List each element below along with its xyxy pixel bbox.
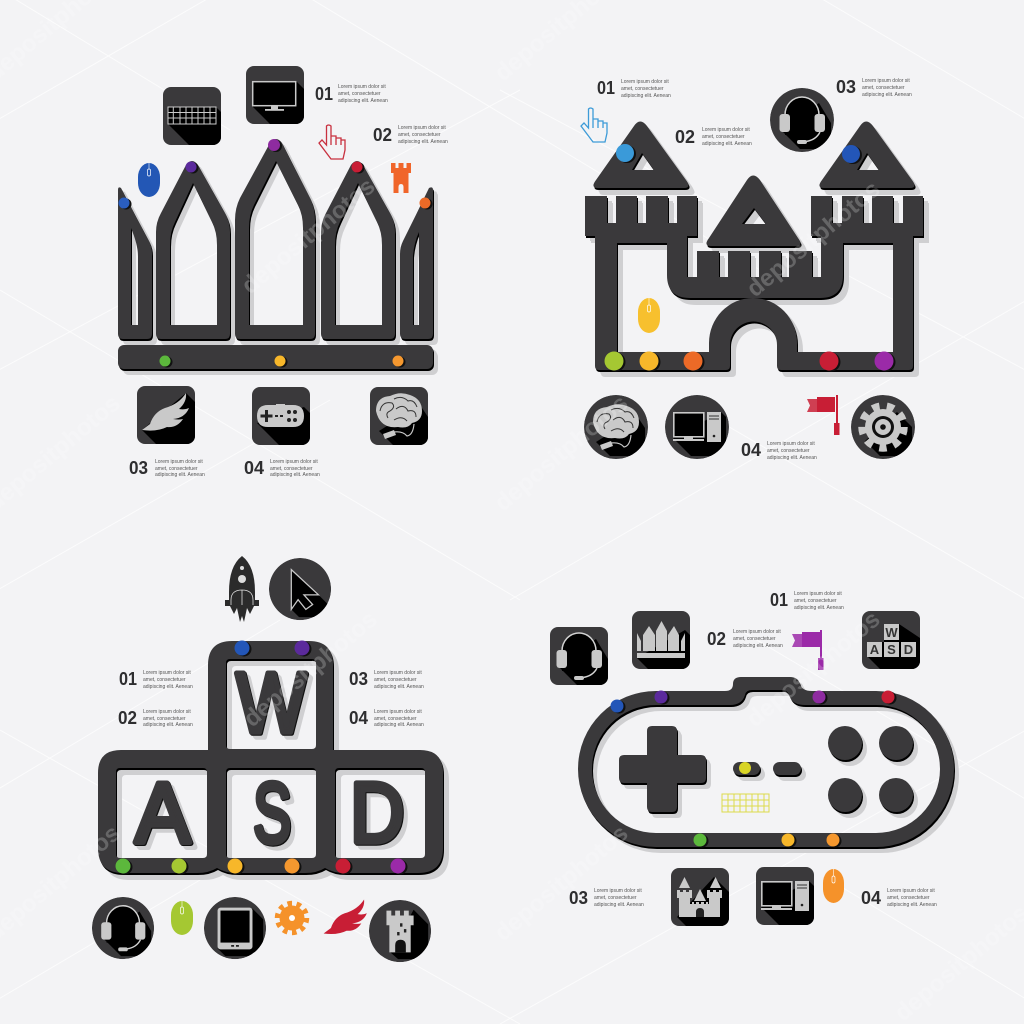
yellow switch dot	[739, 762, 751, 774]
watermark text: depositphotos	[490, 390, 634, 517]
info 03: adipiscing elit. Aenean	[374, 684, 424, 690]
icon: tower	[369, 900, 431, 962]
icon: yellow mouse	[638, 298, 660, 333]
icon: gamepad	[252, 387, 310, 445]
icon: wing	[137, 386, 195, 444]
key letter W: W	[236, 656, 306, 751]
info 01	[770, 590, 844, 611]
icon: brain	[584, 395, 648, 459]
info 02: Lorem ipsum dolor sit	[143, 709, 191, 715]
info 04: amet, consectetuer	[270, 466, 313, 472]
info 04	[244, 458, 320, 478]
info 04	[741, 440, 817, 461]
icon: monitor	[246, 66, 304, 124]
info 03: amet, consectetuer	[594, 895, 637, 901]
info 02: 02	[118, 708, 137, 728]
info 04: amet, consectetuer	[374, 716, 417, 722]
info 03: amet, consectetuer	[862, 85, 905, 91]
info 04: amet, consectetuer	[767, 448, 810, 454]
icon: WASD keys: S	[887, 642, 896, 657]
info 01: adipiscing elit. Aenean	[143, 684, 193, 690]
info 03: adipiscing elit. Aenean	[862, 92, 912, 98]
icon: crown	[632, 611, 690, 669]
icon: blue mouse	[138, 163, 160, 197]
icon: cursor	[269, 558, 331, 620]
info 02: Lorem ipsum dolor sit	[398, 125, 446, 131]
info 02: adipiscing elit. Aenean	[143, 722, 193, 728]
info 04: adipiscing elit. Aenean	[374, 722, 424, 728]
panel: castle timeline	[581, 77, 923, 461]
info 03: 03	[836, 77, 856, 97]
info 04: 04	[741, 440, 761, 460]
icon: lime mouse	[171, 901, 193, 935]
crown spikes	[118, 139, 433, 369]
info 04: adipiscing elit. Aenean	[767, 455, 817, 461]
watermark text: depositphotos	[742, 606, 886, 733]
info 04: adipiscing elit. Aenean	[887, 902, 937, 908]
info 02: 02	[373, 125, 392, 145]
info 01: amet, consectetuer	[794, 598, 837, 604]
icon: WASD keys: W	[885, 625, 898, 640]
info 04: Lorem ipsum dolor sit	[374, 709, 422, 715]
info 03: 03	[569, 888, 588, 908]
info 02: adipiscing elit. Aenean	[733, 643, 783, 649]
icon: headset	[770, 88, 834, 152]
info 02: amet, consectetuer	[702, 134, 745, 140]
info 01: 01	[315, 84, 333, 104]
info 04: Lorem ipsum dolor sit	[270, 459, 318, 465]
watermark text: depositphotos	[742, 176, 886, 303]
info 04: 04	[861, 888, 881, 908]
icon: red flag	[807, 395, 840, 435]
info 01: amet, consectetuer	[143, 677, 186, 683]
icon: headset	[550, 627, 608, 685]
info 02	[675, 127, 752, 147]
icon: orange tower	[391, 163, 411, 193]
info 01: adipiscing elit. Aenean	[338, 98, 388, 104]
info 01	[119, 669, 193, 690]
watermark text: depositphotos	[490, 820, 634, 947]
icon: rocket	[225, 556, 259, 622]
info 02: amet, consectetuer	[143, 716, 186, 722]
info 01: 01	[119, 669, 137, 689]
icon: red hand cursor	[319, 125, 345, 159]
info 04: 04	[244, 458, 264, 478]
icon: red wing	[324, 899, 367, 934]
info 01	[315, 84, 388, 104]
timeline dots	[118, 139, 430, 366]
info 01: Lorem ipsum dolor sit	[794, 591, 842, 597]
panel: WASD keys timeline	[92, 556, 443, 962]
info 03: Lorem ipsum dolor sit	[862, 78, 910, 84]
key letter A: A	[135, 766, 190, 861]
panel: gamepad timeline	[550, 590, 954, 926]
watermark text: depositphotos	[239, 606, 383, 733]
timeline dots	[604, 144, 894, 370]
key outlines	[98, 641, 443, 873]
watermark text: depositphotos	[237, 173, 381, 300]
icon: headset	[92, 897, 154, 959]
info 04: adipiscing elit. Aenean	[270, 472, 320, 478]
timeline dots	[610, 690, 894, 846]
castle shape	[585, 122, 923, 370]
info 02: adipiscing elit. Aenean	[702, 141, 752, 147]
gamepad outline	[578, 677, 954, 847]
icon: castle	[671, 868, 729, 926]
info 01: 01	[770, 590, 788, 610]
info 01: Lorem ipsum dolor sit	[621, 79, 669, 85]
info 02: amet, consectetuer	[398, 132, 441, 138]
info 03	[836, 77, 912, 98]
icon: yellow keyboard	[722, 794, 769, 812]
info 01: amet, consectetuer	[621, 86, 664, 92]
info 02	[707, 629, 783, 649]
info 03	[349, 669, 424, 690]
info 02: Lorem ipsum dolor sit	[702, 127, 750, 133]
key letter S: S	[253, 766, 291, 861]
info 03: Lorem ipsum dolor sit	[155, 459, 203, 465]
info 04: amet, consectetuer	[887, 895, 930, 901]
info 03: amet, consectetuer	[374, 677, 417, 683]
icon: computer	[756, 867, 814, 925]
icon: blue hand cursor	[581, 108, 607, 142]
info 04: Lorem ipsum dolor sit	[767, 441, 815, 447]
info 04	[861, 888, 937, 908]
info 02: 02	[707, 629, 726, 649]
info 01: Lorem ipsum dolor sit	[338, 84, 386, 90]
info 02	[118, 708, 193, 728]
info 03	[129, 458, 205, 478]
info 03: 03	[129, 458, 148, 478]
info 02	[373, 125, 448, 145]
info 01	[597, 78, 671, 99]
icon: WASD keys	[862, 611, 920, 669]
info 03: Lorem ipsum dolor sit	[374, 670, 422, 676]
info 02: adipiscing elit. Aenean	[398, 139, 448, 145]
icon: WASD keys: D	[904, 642, 913, 657]
info 01: 01	[597, 78, 615, 98]
info 03: adipiscing elit. Aenean	[155, 472, 205, 478]
info 04: Lorem ipsum dolor sit	[887, 888, 935, 894]
info 01: adipiscing elit. Aenean	[621, 93, 671, 99]
icon: orange mouse	[823, 869, 844, 903]
info 01: amet, consectetuer	[338, 91, 381, 97]
icon: purple flag	[792, 630, 824, 670]
info 04: 04	[349, 708, 368, 728]
info 03	[569, 888, 644, 908]
info 02: amet, consectetuer	[733, 636, 776, 642]
icon: keyboard	[163, 87, 221, 145]
panel: crown timeline	[118, 66, 448, 478]
icon: tablet	[204, 897, 266, 959]
key letter D: D	[350, 766, 404, 861]
icon: computer	[665, 395, 729, 459]
info 01: Lorem ipsum dolor sit	[143, 670, 191, 676]
info 03: amet, consectetuer	[155, 466, 198, 472]
icon: brain	[370, 387, 428, 445]
info 02: Lorem ipsum dolor sit	[733, 629, 781, 635]
info 02: 02	[675, 127, 695, 147]
timeline dots	[116, 640, 406, 874]
info 03: Lorem ipsum dolor sit	[594, 888, 642, 894]
icon: gear	[851, 395, 915, 459]
gamepad controls	[619, 726, 913, 812]
info 03: 03	[349, 669, 368, 689]
info 03: adipiscing elit. Aenean	[594, 902, 644, 908]
icon: WASD keys: A	[870, 642, 880, 657]
icon: orange gear	[278, 904, 306, 932]
info 04	[349, 708, 424, 728]
info 01: adipiscing elit. Aenean	[794, 605, 844, 611]
